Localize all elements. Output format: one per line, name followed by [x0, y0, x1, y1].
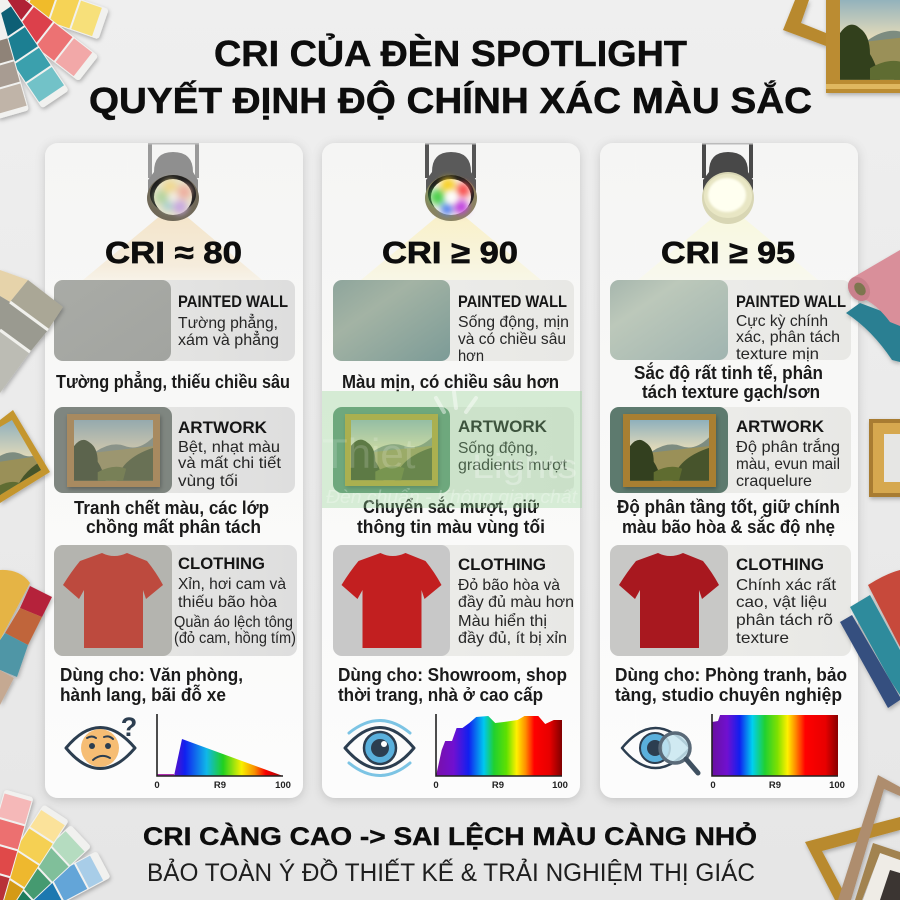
light beam	[361, 205, 541, 280]
watermark: Thiet	[322, 430, 416, 477]
light beam	[83, 205, 262, 280]
caption: wall: tách texture gạch/sơn	[642, 382, 820, 402]
panel: CRI 90	[322, 143, 580, 798]
caption: wall	[634, 362, 823, 402]
icon: confused eye	[66, 712, 137, 768]
row: painted wall: xám và phẳng	[178, 330, 279, 349]
row: clothing: (đỏ cam, hồng tím)	[174, 630, 296, 647]
usage text: thời trang, nhà ở cao cấp	[338, 685, 543, 705]
title: QUYẾT ĐỊNH ĐỘ CHÍNH XÁC MÀU SẮC	[89, 79, 812, 121]
row: clothing: CLOTHING	[178, 554, 265, 573]
row: artwork: ARTWORK	[458, 417, 548, 436]
decoration: fabric samples right	[840, 570, 900, 708]
decoration: paint swatch fan bottom left	[0, 789, 111, 900]
caption: artwork	[74, 498, 269, 537]
bottom headline: CRI CÀNG CAO -> SAI LỆCH MÀU CÀNG NHỎ	[143, 821, 757, 851]
row: artwork: màu, evun mail	[736, 456, 840, 473]
row: artwork: ARTWORK	[178, 418, 268, 437]
caption: artwork: chồng mất phân tách	[86, 517, 261, 537]
decoration: pink and teal fabric rolls right	[843, 250, 900, 362]
decoration: tilted frame left	[0, 410, 50, 503]
usage text: Dùng cho: Phòng tranh, bảo	[615, 665, 847, 685]
chart: spectrum CRI 80: 100	[275, 780, 291, 791]
row: artwork: ARTWORK	[736, 417, 825, 436]
row: artwork: và mất chi tiết	[178, 455, 282, 472]
watermark	[322, 391, 582, 508]
decoration: paint swatches left	[0, 270, 63, 393]
row: clothing: Đỏ bão hòa và	[458, 577, 560, 594]
light beam	[638, 205, 818, 280]
chart: spectrum CRI 80: R9	[214, 780, 226, 791]
icon: spotlight	[425, 143, 477, 221]
decoration: gold frame right	[869, 419, 900, 497]
title	[89, 32, 812, 121]
row: clothing	[610, 545, 851, 656]
caption: artwork: màu bão hòa & sắc độ nhẹ	[622, 516, 835, 537]
panel: CRI 95	[600, 143, 858, 798]
row: artwork: gradients mượt	[458, 457, 568, 474]
usage text	[338, 665, 567, 705]
row: artwork	[610, 407, 851, 493]
decoration: colour swatch fan top left	[0, 0, 109, 119]
row: painted wall: xác, phân tách	[736, 329, 840, 346]
decoration: fabric samples left	[0, 570, 52, 705]
watermark: Đèn chuẩn - Không gian chất	[326, 487, 578, 507]
row: artwork	[333, 407, 574, 493]
caption: artwork: Tranh chết màu, các lớp	[74, 498, 269, 518]
row: painted wall: PAINTED WALL	[458, 292, 567, 311]
usage text: tàng, studio chuyên nghiệp	[615, 685, 842, 705]
row: painted wall	[610, 280, 851, 363]
caption: artwork: Độ phân tầng tốt, giữ chính	[617, 497, 840, 517]
icon: spotlight	[147, 143, 199, 221]
row: clothing: Xỉn, hơi cam và	[178, 576, 286, 593]
row: artwork: Sống động,	[458, 440, 538, 457]
row: clothing: đầy đủ màu hơn	[458, 594, 574, 611]
chart: spectrum CRI 80	[154, 714, 291, 791]
row: clothing: Màu hiển thị	[458, 612, 547, 630]
caption: artwork: thông tin màu vùng tối	[357, 517, 545, 537]
decoration: wooden frames bottom right	[805, 775, 900, 900]
usage text: hành lang, bãi đỗ xe	[60, 684, 226, 705]
row: clothing: đầy đủ, ít bị xỉn	[458, 630, 567, 647]
row: clothing	[54, 545, 297, 656]
usage text: Dùng cho: Showroom, shop	[338, 665, 567, 685]
chart: spectrum CRI 95	[710, 714, 845, 791]
icon: clear eye	[345, 720, 414, 776]
caption: wall: Tường phẳng, thiếu chiều sâu	[56, 371, 290, 392]
title: CRI CỦA ĐÈN SPOTLIGHT	[214, 32, 687, 74]
row: painted wall: texture mịn	[736, 346, 819, 363]
watermark: Lights	[472, 448, 577, 486]
chart: spectrum CRI 90: 0	[433, 780, 439, 791]
heading: CRI 90: CRI ≥ 90	[382, 235, 518, 270]
row: clothing: CLOTHING	[458, 555, 546, 574]
caption: wall: Màu mịn, có chiều sâu hơn	[342, 372, 559, 392]
icon: eye with magnifier	[622, 728, 698, 773]
row: artwork: Độ phân trắng	[736, 437, 840, 456]
panel: CRI 80	[45, 143, 303, 798]
chart: spectrum CRI 95: R9	[769, 780, 781, 791]
chart: spectrum CRI 90: R9	[492, 780, 504, 791]
row: clothing: cao, vật liệu	[736, 594, 827, 611]
row: clothing: Quần áo lệch tông	[174, 614, 293, 631]
row: painted wall: và có chiều sâu	[458, 331, 566, 348]
chart: spectrum CRI 80: 0	[154, 780, 160, 791]
row: painted wall: Tường phẳng,	[178, 313, 278, 332]
usage text	[615, 665, 847, 705]
row: painted wall: PAINTED WALL	[736, 292, 846, 311]
caption: wall: Sắc độ rất tinh tế, phân	[634, 362, 823, 383]
chart: spectrum CRI 95: 0	[710, 780, 716, 791]
heading: CRI 95: CRI ≥ 95	[661, 235, 795, 270]
row: artwork: craquelure	[736, 473, 812, 490]
row: clothing: texture	[736, 630, 789, 647]
row: clothing: phân tách rõ	[736, 612, 833, 629]
row: painted wall: PAINTED WALL	[178, 292, 288, 311]
icon: confused eye: ?	[121, 712, 137, 742]
icon: spotlight	[702, 143, 754, 224]
usage text: Dùng cho: Văn phòng,	[60, 665, 243, 685]
row: clothing: CLOTHING	[736, 555, 824, 574]
row: artwork: Bệt, nhạt màu	[178, 439, 280, 456]
row: painted wall	[333, 280, 574, 365]
row: artwork: vùng tối	[178, 473, 238, 490]
chart: spectrum CRI 95: 100	[829, 780, 845, 791]
row: painted wall: Sống động, mịn	[458, 314, 569, 331]
row: clothing: Chính xác rất	[736, 577, 837, 594]
row: painted wall: hơn	[458, 348, 484, 365]
usage text	[60, 665, 243, 705]
bottom subheadline: BẢO TOÀN Ý ĐỒ THIẾT KẾ & TRẢI NGHIỆM THỊ GIÁC	[147, 857, 755, 887]
chart: spectrum CRI 90	[433, 714, 568, 791]
caption: artwork	[357, 496, 545, 537]
row: artwork	[54, 407, 295, 493]
row: clothing: thiếu bão hòa	[178, 594, 277, 611]
row: painted wall	[54, 280, 295, 361]
row: painted wall: Cực kỳ chính	[736, 313, 828, 330]
caption: artwork: Chuyển sắc mượt, giữ	[363, 496, 540, 517]
row: clothing	[333, 545, 574, 656]
chart: spectrum CRI 90: 100	[552, 780, 568, 791]
decoration: gold frames top right	[783, 0, 900, 93]
caption: artwork	[617, 497, 840, 537]
heading: CRI 80: CRI ≈ 80	[105, 235, 242, 270]
